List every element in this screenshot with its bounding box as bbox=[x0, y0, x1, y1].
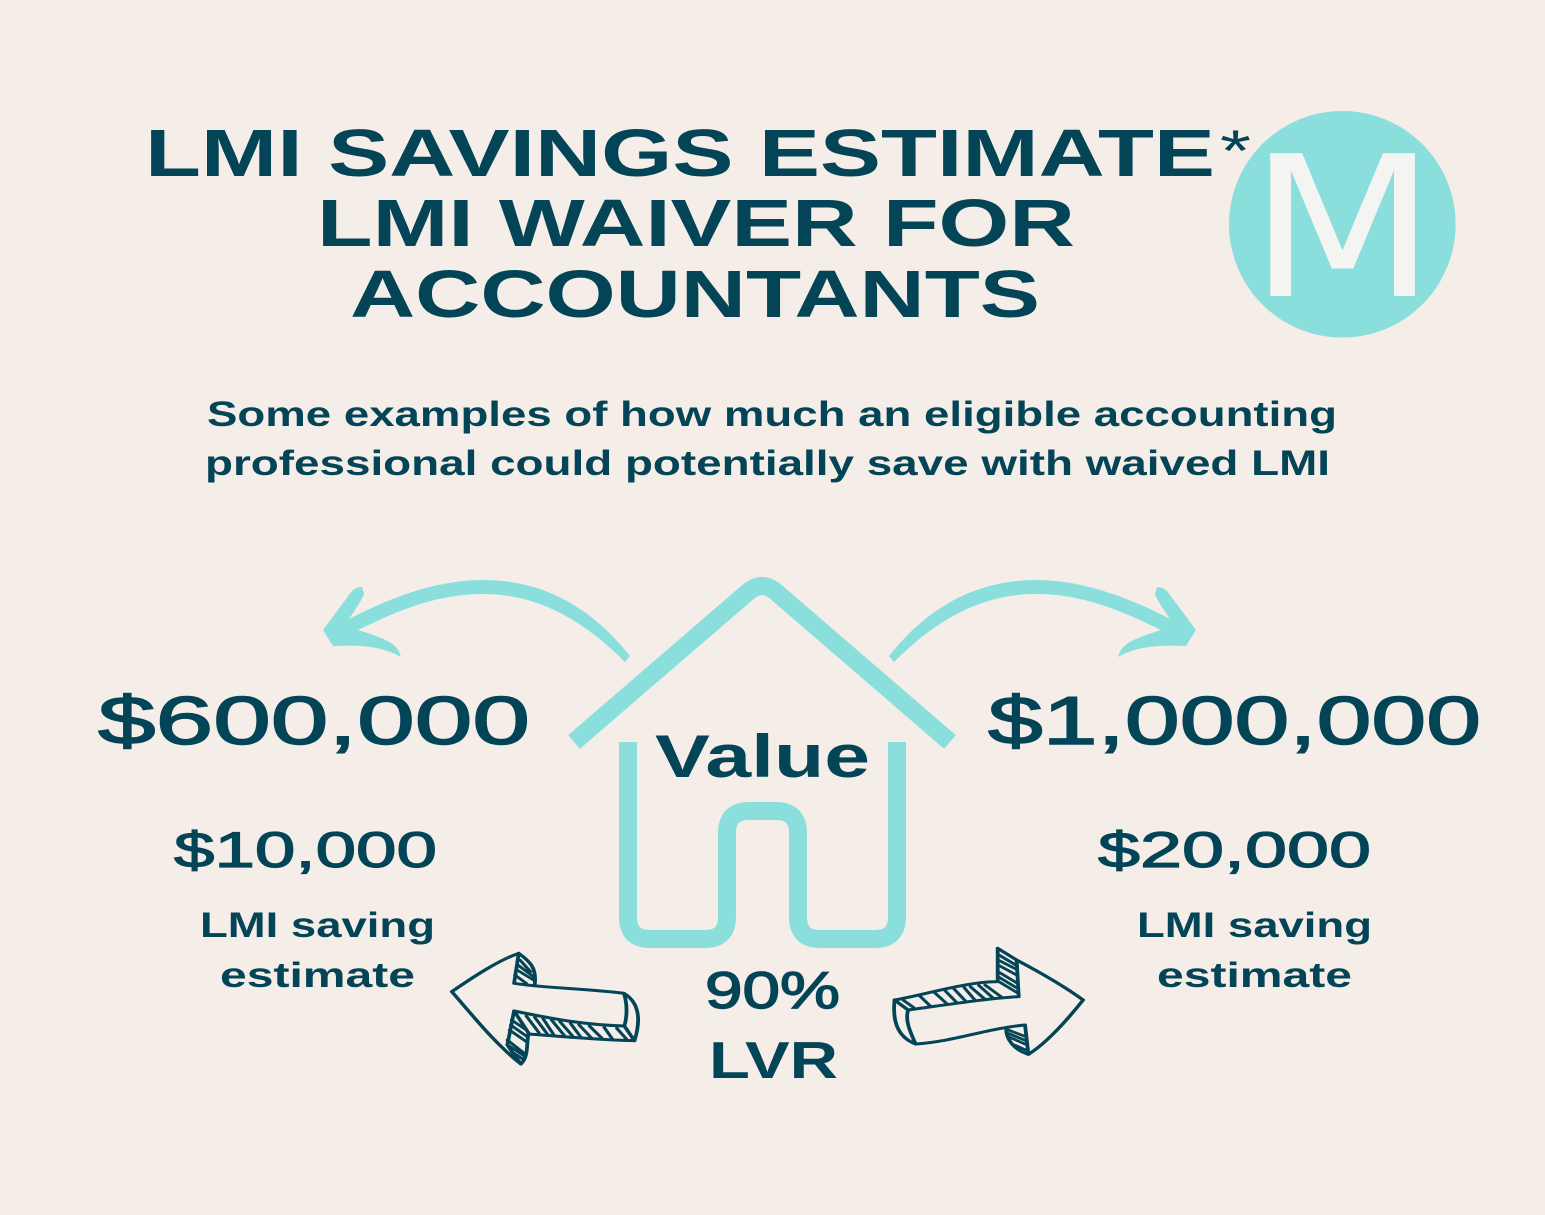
title bbox=[145, 116, 1251, 332]
left saving amount: $10,000 bbox=[174, 822, 437, 878]
right saving label bbox=[1137, 906, 1372, 995]
subtitle bbox=[205, 395, 1337, 483]
icon: house bbox=[574, 586, 950, 939]
logo badge: M bbox=[1249, 115, 1436, 343]
curved arrow: left bbox=[323, 580, 630, 662]
left value: $600,000 bbox=[98, 683, 530, 759]
icon: sketched arrow left bbox=[452, 953, 638, 1064]
right saving amount: $20,000 bbox=[1098, 822, 1371, 878]
LVR label: 90% bbox=[705, 962, 840, 1020]
left saving label bbox=[200, 906, 435, 995]
title: LMI WAIVER FOR bbox=[317, 186, 1075, 261]
left saving label: estimate bbox=[220, 956, 415, 995]
subtitle: professional could potentially save with waived LMI bbox=[205, 444, 1330, 483]
right value: $1,000,000 bbox=[988, 683, 1481, 759]
title: LMI SAVINGS ESTIMATE bbox=[145, 116, 1215, 191]
right saving label: estimate bbox=[1157, 956, 1352, 995]
LVR label bbox=[705, 962, 840, 1090]
icon: sketched arrow right bbox=[894, 948, 1083, 1054]
left saving label: LMI saving bbox=[200, 906, 435, 945]
house label: Value bbox=[655, 723, 870, 790]
subtitle: Some examples of how much an eligible accounting bbox=[207, 395, 1337, 434]
title: * bbox=[1220, 119, 1251, 184]
title: ACCOUNTANTS bbox=[350, 257, 1040, 332]
LVR label: LVR bbox=[709, 1032, 838, 1090]
right saving label: LMI saving bbox=[1137, 906, 1372, 945]
curved arrow: right bbox=[889, 580, 1196, 662]
